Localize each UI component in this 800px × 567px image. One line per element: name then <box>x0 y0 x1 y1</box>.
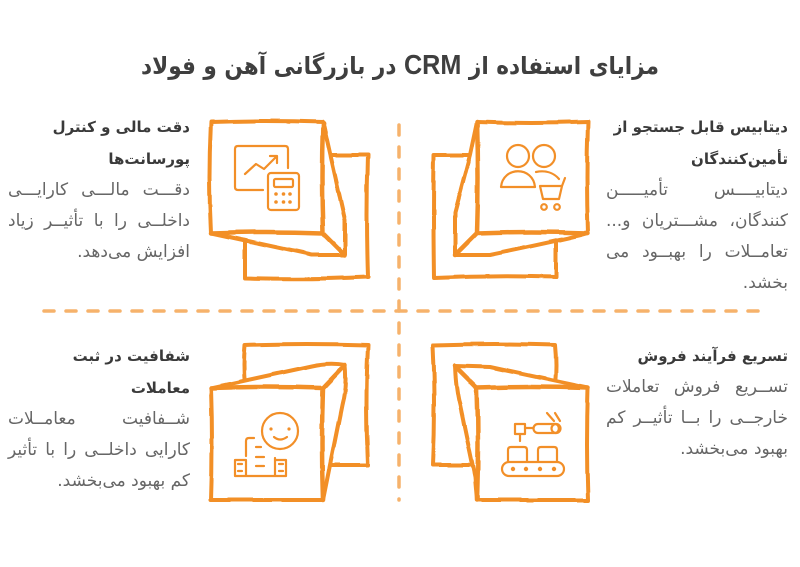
dashed quadrant dividers <box>44 125 758 500</box>
box bottom right <box>433 344 588 500</box>
text block: supplier database: دیتابیــــس تأمیـــــن <box>606 180 788 200</box>
text block: supplier database <box>606 118 788 293</box>
icon: robot arm and conveyor <box>502 413 564 476</box>
text block: supplier database: تعامــلات را بهبــود می <box>606 242 788 262</box>
text block: financial accuracy: داخلــی را با تأثیــر زیاد <box>8 211 190 231</box>
text block: transaction transparency: کم بهبود می‌بخشد. <box>57 471 190 491</box>
box top left <box>210 121 368 279</box>
icon: people with cart <box>501 145 565 210</box>
text block: faster sales: تسریع فرآیند فروش <box>638 347 788 365</box>
text block: transaction transparency: معاملات <box>131 379 190 397</box>
text block: supplier database: بخشد. <box>743 273 788 293</box>
text block: financial accuracy: دقـــت مالـــی کارایـــی <box>8 180 190 200</box>
icon: chart and calculator <box>235 146 299 210</box>
text block: supplier database: تأمین‌کنندگان <box>691 150 788 168</box>
text block: transaction transparency: کارایی داخلــی را با تأثیر <box>8 440 190 460</box>
text block: financial accuracy: دقت مالی و کنترل <box>53 118 190 136</box>
text block: faster sales: بهبود می‌بخشد. <box>680 439 788 459</box>
text block: transaction transparency: شــفافیت معامــلات <box>8 409 190 429</box>
text block: supplier database: کنندگان، مشـــتریان و... <box>606 211 788 231</box>
text block: supplier database: دیتابیس قابل جستجو از <box>614 118 788 136</box>
title: مزایای استفاده از CRM در بازرگانی آهن و فولاد <box>141 49 659 80</box>
text block: transaction transparency <box>7 347 190 491</box>
text block: financial accuracy: افزایش می‌دهد. <box>77 242 190 262</box>
text block: faster sales: خارجــی را بــا تأثیــر کم <box>606 408 788 428</box>
box top right <box>434 122 588 278</box>
text block: transaction transparency: شفافیت در ثبت <box>73 347 190 365</box>
box bottom left <box>211 344 368 500</box>
text block: financial accuracy <box>8 118 190 262</box>
text block: faster sales <box>606 346 788 459</box>
text block: faster sales: تســریع فروش تعاملات <box>606 377 788 397</box>
icon: smiley with building <box>235 413 298 476</box>
text block: financial accuracy: پورسانت‌ها <box>108 150 190 168</box>
